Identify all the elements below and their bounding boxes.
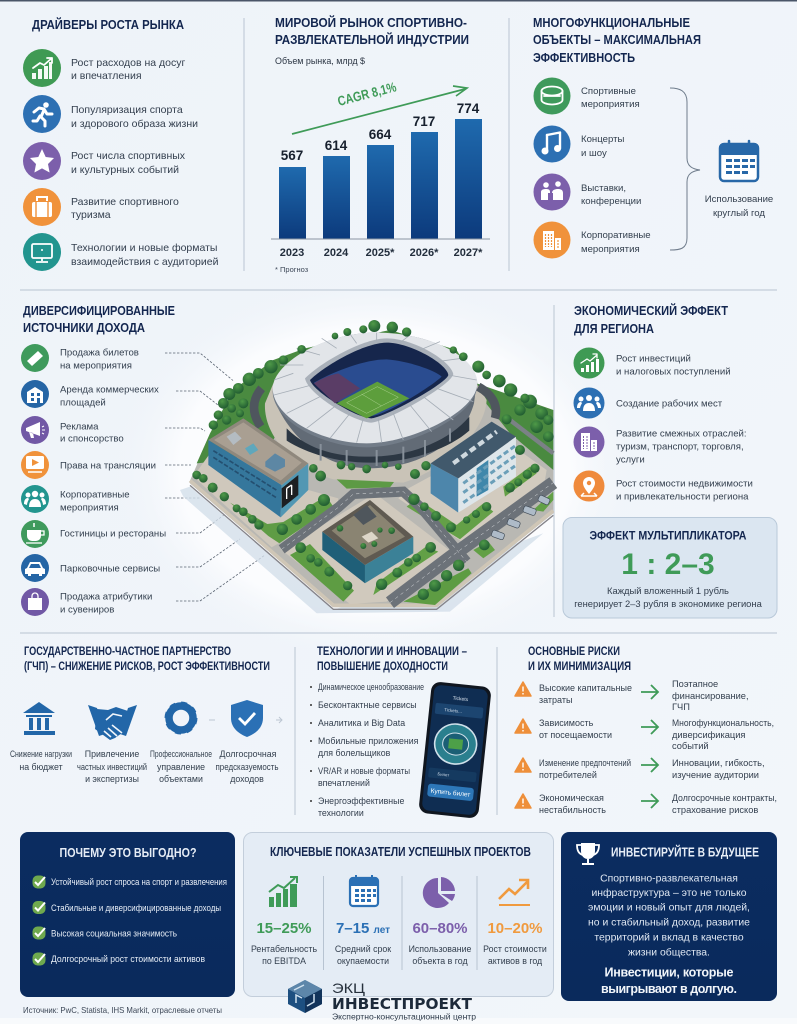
indicator: utilization: 60–80% <box>412 920 468 937</box>
bar chart: 2026* <box>410 247 439 259</box>
technology bullet list: технологии <box>318 808 364 818</box>
indicator: utilization: объекта в год <box>412 956 468 966</box>
ground blocks <box>265 383 487 483</box>
heading: technology: ПОВЫШЕНИЕ ДОХОДНОСТИ <box>317 659 448 673</box>
risk: attendance: Зависимость <box>539 718 594 728</box>
effect: investments: и налоговых поступлений <box>616 366 731 378</box>
heading: economic effect: ДЛЯ РЕГИОНА <box>574 321 655 336</box>
roads <box>282 492 467 562</box>
effect: investments <box>574 348 731 378</box>
indicator: asset growth: 10–20% <box>487 920 543 937</box>
effect: investments: Рост инвестиций <box>616 354 691 364</box>
callout: multiplier effect: Каждый вложенный 1 рубль <box>607 585 729 596</box>
bar chart: 614 <box>325 138 348 153</box>
driver: tourism <box>23 188 179 226</box>
driver: tourism: Развитие спортивного <box>71 196 179 208</box>
income: corporate: Корпоративные <box>60 490 130 500</box>
venue: exhibitions <box>534 174 641 210</box>
venue: concerts: Концерты <box>581 134 624 145</box>
income: broadcasting: Права на трансляции <box>60 460 156 472</box>
panel: risks and mitigation <box>515 644 777 815</box>
income: parking: Парковочные сервисы <box>60 564 160 574</box>
logo text: Экспертно-консультационный центр <box>332 1012 477 1022</box>
technology bullet list: для болельщиков <box>318 748 391 758</box>
trees <box>192 320 554 600</box>
heading: invest: ИНВЕСТИРУЙТЕ В БУДУЩЕЕ <box>611 844 759 860</box>
risk: economic instability <box>515 793 777 815</box>
phone with ticket app: Купить билет <box>430 787 471 799</box>
venue: corporate: Корпоративные <box>581 230 651 241</box>
panel: economic effect for region <box>563 303 777 618</box>
technology bullet list: Бесконтактные сервисы <box>318 700 417 710</box>
venue: corporate <box>534 222 651 258</box>
phone with ticket app: Билет <box>437 771 450 778</box>
driver: events: и культурных событий <box>71 164 179 176</box>
bar chart: 664 <box>369 127 392 142</box>
heading: drivers: ДРАЙВЕРЫ РОСТА РЫНКА <box>32 17 185 32</box>
technology bullet list: VR/AR и новые форматы <box>318 766 410 776</box>
panel: why it is profitable <box>20 832 235 997</box>
risk: capital costs <box>515 679 749 712</box>
benefit: asset value: Долгосрочный рост стоимости активов <box>51 954 205 964</box>
caption: all-year use <box>705 194 773 219</box>
income: rent: Аренда коммерческих <box>60 384 159 396</box>
risk: attendance: от посещаемости <box>539 730 612 740</box>
risk: consumer preferences: изучение аудитории <box>672 770 759 780</box>
panel: key indicators <box>244 832 554 996</box>
phone with ticket app <box>418 681 492 819</box>
logo mark <box>288 980 322 1013</box>
phone with ticket app: Tickets... <box>444 707 462 714</box>
indicator: EBITDA: Рентабельность <box>251 944 317 954</box>
income: merchandise: и сувениров <box>60 604 114 616</box>
effect: jobs <box>574 388 723 418</box>
income: hotels <box>21 520 166 548</box>
driver: events: Рост числа спортивных <box>71 150 186 162</box>
right building <box>431 422 516 513</box>
PPP item: predictability <box>216 700 279 784</box>
caption: all-year use: Использование <box>705 194 773 205</box>
icon: calendar <box>720 141 758 181</box>
PPP item: management <box>150 704 212 784</box>
risk: economic instability: нестабильность <box>539 805 606 815</box>
technology bullet list: Энергоэффективные <box>318 796 404 806</box>
income: corporate: мероприятия <box>60 502 119 514</box>
caption: all-year use: круглый год <box>713 208 765 219</box>
indicator: EBITDA: по EBITDA <box>262 956 306 966</box>
heading: risks: ОСНОВНЫЕ РИСКИ <box>528 644 620 658</box>
heading: economic effect: ЭКОНОМИЧЕСКИЙ ЭФФЕКТ <box>574 303 728 318</box>
driver: tourism: туризма <box>71 209 111 221</box>
heading: PPP: (ГЧП) – СНИЖЕНИЕ РИСКОВ, РОСТ ЭФФЕКТИВНОСТИ <box>24 661 270 673</box>
income: parking <box>21 554 160 582</box>
heading: world market: РАЗВЛЕКАТЕЛЬНОЙ ИНДУСТРИИ <box>275 32 469 47</box>
benefit: income: Стабильные и диверсифицированные доходы <box>51 903 221 913</box>
indicator: asset growth: Рост стоимости <box>483 944 547 954</box>
benefit: social <box>32 926 177 940</box>
income: corporate <box>21 485 130 514</box>
risk: capital costs: ГЧП <box>672 702 690 712</box>
bar chart: 2024 <box>324 247 349 259</box>
center building <box>322 500 413 583</box>
venue: corporate: мероприятия <box>581 244 640 255</box>
PPP item: budget <box>10 702 72 772</box>
heading: multifunctional: МНОГОФУНКЦИОНАЛЬНЫЕ <box>533 15 690 30</box>
PPP item: management: управление <box>157 762 205 772</box>
venue: sports: Спортивные <box>581 86 636 97</box>
effect: jobs: Создание рабочих мест <box>616 398 723 410</box>
benefit: income <box>32 901 221 914</box>
panel: invest in the future <box>561 832 777 1001</box>
income: merchandise: Продажа атрибутики <box>60 592 152 602</box>
heading: multifunctional: ОБЪЕКТЫ – МАКСИМАЛЬНАЯ <box>533 32 701 47</box>
indicator: payback <box>335 875 391 966</box>
driver: spending <box>23 49 186 87</box>
PPP item: predictability: Долгосрочная <box>220 749 277 759</box>
heading: key indicators: КЛЮЧЕВЫЕ ПОКАЗАТЕЛИ УСПЕШНЫХ ПРОЕКТОВ <box>270 844 531 859</box>
panel: technology and innovation <box>310 644 492 819</box>
callout: multiplier effect <box>563 518 777 618</box>
phone with ticket app: Tickets <box>452 695 469 703</box>
effect: property value: и привлекательности региона <box>616 492 749 502</box>
logo <box>288 980 477 1022</box>
callout: multiplier effect: ЭФФЕКТ МУЛЬТИПЛИКАТОРА <box>590 528 747 542</box>
paragraph: территорий и вклад в качество <box>594 932 744 944</box>
heading: technology: ТЕХНОЛОГИИ И ИННОВАЦИИ – <box>317 644 467 658</box>
effect: adjacent industries: услуги <box>616 454 645 466</box>
heading: income: ДИВЕРСИФИЦИРОВАННЫЕ <box>23 303 175 318</box>
paragraph: эмоции и новый опыт для людей, <box>588 902 750 914</box>
technology bullet list: Динамическое ценообразование <box>318 682 424 692</box>
income: rent <box>21 380 159 408</box>
call to action <box>601 966 737 996</box>
footnote: * Прогноз <box>275 265 309 274</box>
indicator: payback: окупаемости <box>337 956 389 966</box>
paragraph: Спортивно-развлекательная <box>600 874 738 884</box>
paragraph <box>588 874 750 958</box>
icon: trophy <box>577 843 599 865</box>
panel: diversified income sources <box>21 303 265 616</box>
PPP item: predictability: доходов <box>230 774 264 784</box>
heading: world market <box>275 15 469 47</box>
risk: capital costs: Высокие капитальные <box>539 683 632 693</box>
technology bullet list: Аналитика и Big Data <box>318 718 405 728</box>
bar chart <box>271 101 490 259</box>
PPP item: investors: и экспертизы <box>85 774 139 784</box>
indicator: asset growth <box>483 880 547 966</box>
heading: technology <box>317 644 467 673</box>
PPP item: predictability: предсказуемость <box>216 762 279 772</box>
faint arrows <box>209 717 282 723</box>
risk: consumer preferences: Инновации, гибкость, <box>672 758 765 768</box>
bar chart: 2025* <box>366 247 395 259</box>
panel: public-private partnership <box>10 646 282 784</box>
effect: adjacent industries: Развитие смежных отраслей: <box>616 428 747 440</box>
risk: attendance: событий <box>672 741 709 751</box>
driver: spending: и впечатления <box>71 70 142 82</box>
bar chart: 774 <box>457 101 480 116</box>
logo text: ЭКЦ <box>332 980 366 996</box>
driver: technologies: Технологии и новые форматы <box>71 242 217 254</box>
heading: income: ИСТОЧНИКИ ДОХОДА <box>23 320 146 335</box>
bar chart: 2027* <box>454 247 483 259</box>
PPP item: investors <box>77 705 147 784</box>
benefit: demand <box>32 876 227 888</box>
technology bullet list <box>310 682 424 818</box>
driver: sport popularity: и здорового образа жизни <box>71 118 198 130</box>
venue: exhibitions: Выставки, <box>581 183 626 194</box>
venue: exhibitions: конференции <box>581 196 641 207</box>
indicator: asset growth: активов в год <box>488 956 542 966</box>
venue: sports <box>534 78 640 114</box>
heading: PPP: ГОСУДАРСТВЕННО-ЧАСТНОЕ ПАРТНЕРСТВО <box>24 646 231 658</box>
paragraph: жизни общества. <box>628 946 710 958</box>
venue: concerts: и шоу <box>581 148 607 159</box>
call to action: выигрывают в долгую. <box>601 982 737 996</box>
panel: world market chart <box>271 15 490 274</box>
effect: adjacent industries <box>574 426 747 466</box>
driver: spending: Рост расходов на досуг <box>71 57 186 69</box>
income: merchandise <box>21 588 152 616</box>
driver: technologies <box>23 233 219 271</box>
PPP item: investors: частных инвестиций <box>77 762 147 772</box>
risk: capital costs: затраты <box>539 695 572 705</box>
driver: sport popularity: Популяризация спорта <box>71 104 183 116</box>
dashed leader lines <box>165 353 265 601</box>
PPP item: management: объектами <box>159 774 203 784</box>
driver: technologies: взаимодействия с аудиторией <box>71 256 219 268</box>
stadium <box>273 333 477 468</box>
benefit: social: Высокая социальная значимость <box>51 928 177 938</box>
income: hotels: Гостиницы и рестораны <box>60 528 166 540</box>
risk: consumer preferences: потребителей <box>539 770 597 780</box>
bracket <box>670 88 700 250</box>
heading: multifunctional: ЭФФЕКТИВНОСТЬ <box>533 50 635 65</box>
logo text <box>332 980 477 1022</box>
heading: world market: МИРОВОЙ РЫНОК СПОРТИВНО- <box>275 15 467 30</box>
risk: consumer preferences: Изменение предпочтений <box>539 758 631 768</box>
driver: sport popularity <box>23 95 198 133</box>
paragraph: инфраструктура – это не только <box>591 887 747 899</box>
callout: multiplier effect: 1 : 2–3 <box>621 548 715 581</box>
income: advertising: Реклама <box>60 422 99 432</box>
CAGR arrow <box>292 79 467 134</box>
indicator: utilization: Использование <box>409 944 472 954</box>
paragraph: но и стабильный доход, развитие <box>588 916 750 928</box>
callout: multiplier effect: генерирует 2–3 рубля в экономике региона <box>574 598 763 609</box>
CAGR arrow: CAGR 8,1% <box>336 79 398 109</box>
benefit: demand: Устойчивый рост спроса на спорт и развлечения <box>51 877 227 887</box>
benefit: asset value <box>32 952 205 966</box>
risk: capital costs: финансирование, <box>672 691 749 701</box>
PPP item: investors: Привлечение <box>85 749 139 759</box>
PPP item: budget: Снижение нагрузки <box>10 749 72 759</box>
income: broadcasting <box>21 451 156 479</box>
technology bullet list: впечатлений <box>318 778 370 788</box>
risk: economic instability: страхование рисков <box>672 805 758 815</box>
heading: income <box>23 303 175 335</box>
risk: attendance: диверсификация <box>672 730 745 740</box>
effect: property value: Рост стоимости недвижимости <box>616 478 753 490</box>
indicator: payback: Средний срок <box>335 944 391 954</box>
heading: risks <box>528 644 631 673</box>
heading: PPP <box>24 646 270 673</box>
technology bullet list: Мобильные приложения <box>318 736 419 746</box>
income: tickets <box>21 344 139 372</box>
driver: events <box>23 142 186 180</box>
effect: property value <box>574 470 753 502</box>
venue: sports: мероприятия <box>581 99 640 110</box>
bar chart: 717 <box>413 114 435 129</box>
risk: consumer preferences <box>515 758 765 780</box>
heading: multifunctional <box>533 15 701 65</box>
left building <box>208 418 308 517</box>
indicator: EBITDA: 15–25% <box>256 920 312 937</box>
call to action: Инвестиции, которые <box>604 966 734 980</box>
illustration: stadium complex <box>180 320 554 613</box>
indicator: EBITDA <box>251 877 317 966</box>
indicator: payback: 7–15 лет <box>336 920 390 937</box>
source note: Источник: PwC, Statista, IHS Markit, отраслевые отчеты <box>23 1005 222 1015</box>
income: advertising: и спонсорство <box>60 434 124 444</box>
risk: economic instability: Долгосрочные контракты, <box>672 793 777 803</box>
risk: attendance: Многофункциональность, <box>672 718 774 728</box>
income: rent: площадей <box>60 398 106 408</box>
PPP item: budget: на бюджет <box>19 762 63 772</box>
income: tickets: Продажа билетов <box>60 348 139 358</box>
logo text: ИНВЕСТПРОЕКТ <box>332 995 472 1013</box>
cars <box>491 495 551 540</box>
risk: capital costs: Поэтапное <box>672 679 718 689</box>
panel: multifunctional venues <box>533 15 773 258</box>
heading: economic effect <box>574 303 728 336</box>
income: tickets: на мероприятия <box>60 360 132 372</box>
heading: why profitable: ПОЧЕМУ ЭТО ВЫГОДНО? <box>60 845 197 860</box>
panel: market growth drivers <box>23 17 219 271</box>
risk: economic instability: Экономическая <box>539 793 604 803</box>
effect: adjacent industries: туризм, транспорт, торговля, <box>616 442 744 452</box>
PPP item: management: Профессиональное <box>150 749 212 759</box>
risk: attendance <box>515 718 774 751</box>
heading: risks: И ИХ МИНИМИЗАЦИЯ <box>528 659 631 673</box>
bar chart: 567 <box>281 148 303 163</box>
income: advertising <box>21 416 124 444</box>
bar chart: 2023 <box>280 247 304 259</box>
indicator: utilization <box>409 877 472 966</box>
chart subtitle: Объем рынка, млрд $ <box>275 56 366 66</box>
venue: concerts <box>534 126 624 162</box>
